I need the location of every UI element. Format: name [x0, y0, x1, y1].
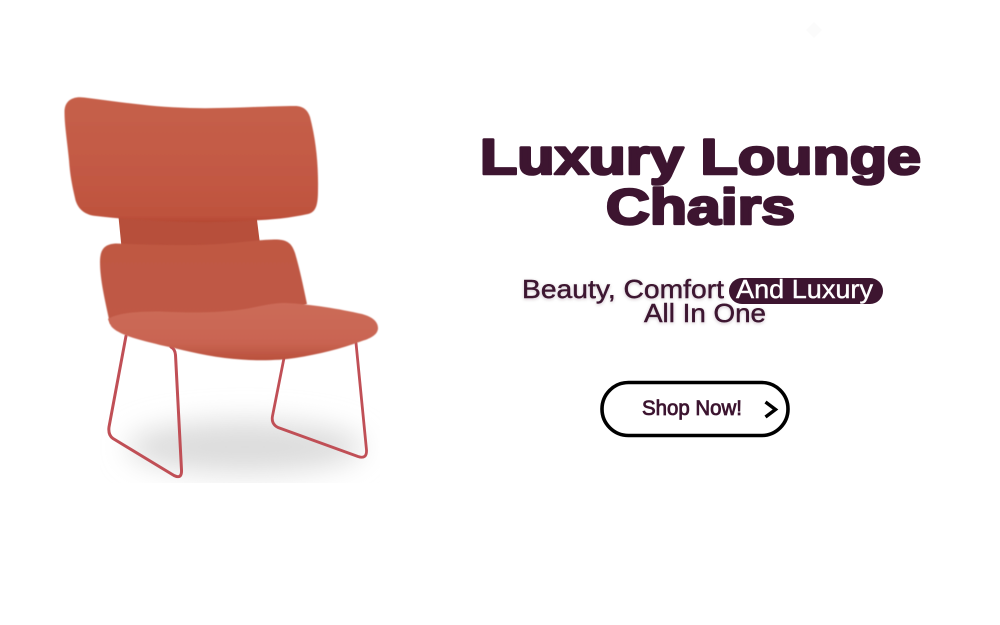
chair floor shadow: [127, 421, 363, 473]
chair headrest: [64, 97, 318, 222]
subtitle text: Beauty, Comfort: Beauty, Comfort: [522, 274, 725, 304]
chair neck panel: [118, 212, 261, 252]
chair front leg: [109, 336, 182, 477]
chair illustration: [64, 97, 378, 477]
chair rear leg: [272, 343, 367, 457]
icon: chevron arrow: [766, 402, 776, 417]
chair seat cushion: [108, 303, 378, 360]
title line 1: Luxury Lounge: [480, 129, 921, 185]
highlighted text: And Luxury: And Luxury: [736, 274, 873, 304]
icon: faint diamond mark: [806, 22, 822, 38]
infographic canvas: [64, 96, 920, 483]
button label: Shop Now!: [642, 397, 742, 420]
chair backrest: [100, 240, 307, 330]
subtitle text: All In One: All In One: [644, 298, 766, 328]
highlight pill: [729, 278, 883, 304]
button outline: [602, 382, 788, 436]
subtitle: [522, 274, 883, 328]
title: [480, 129, 921, 235]
title line 2: Chairs: [606, 179, 795, 235]
shop now button: [602, 382, 788, 436]
